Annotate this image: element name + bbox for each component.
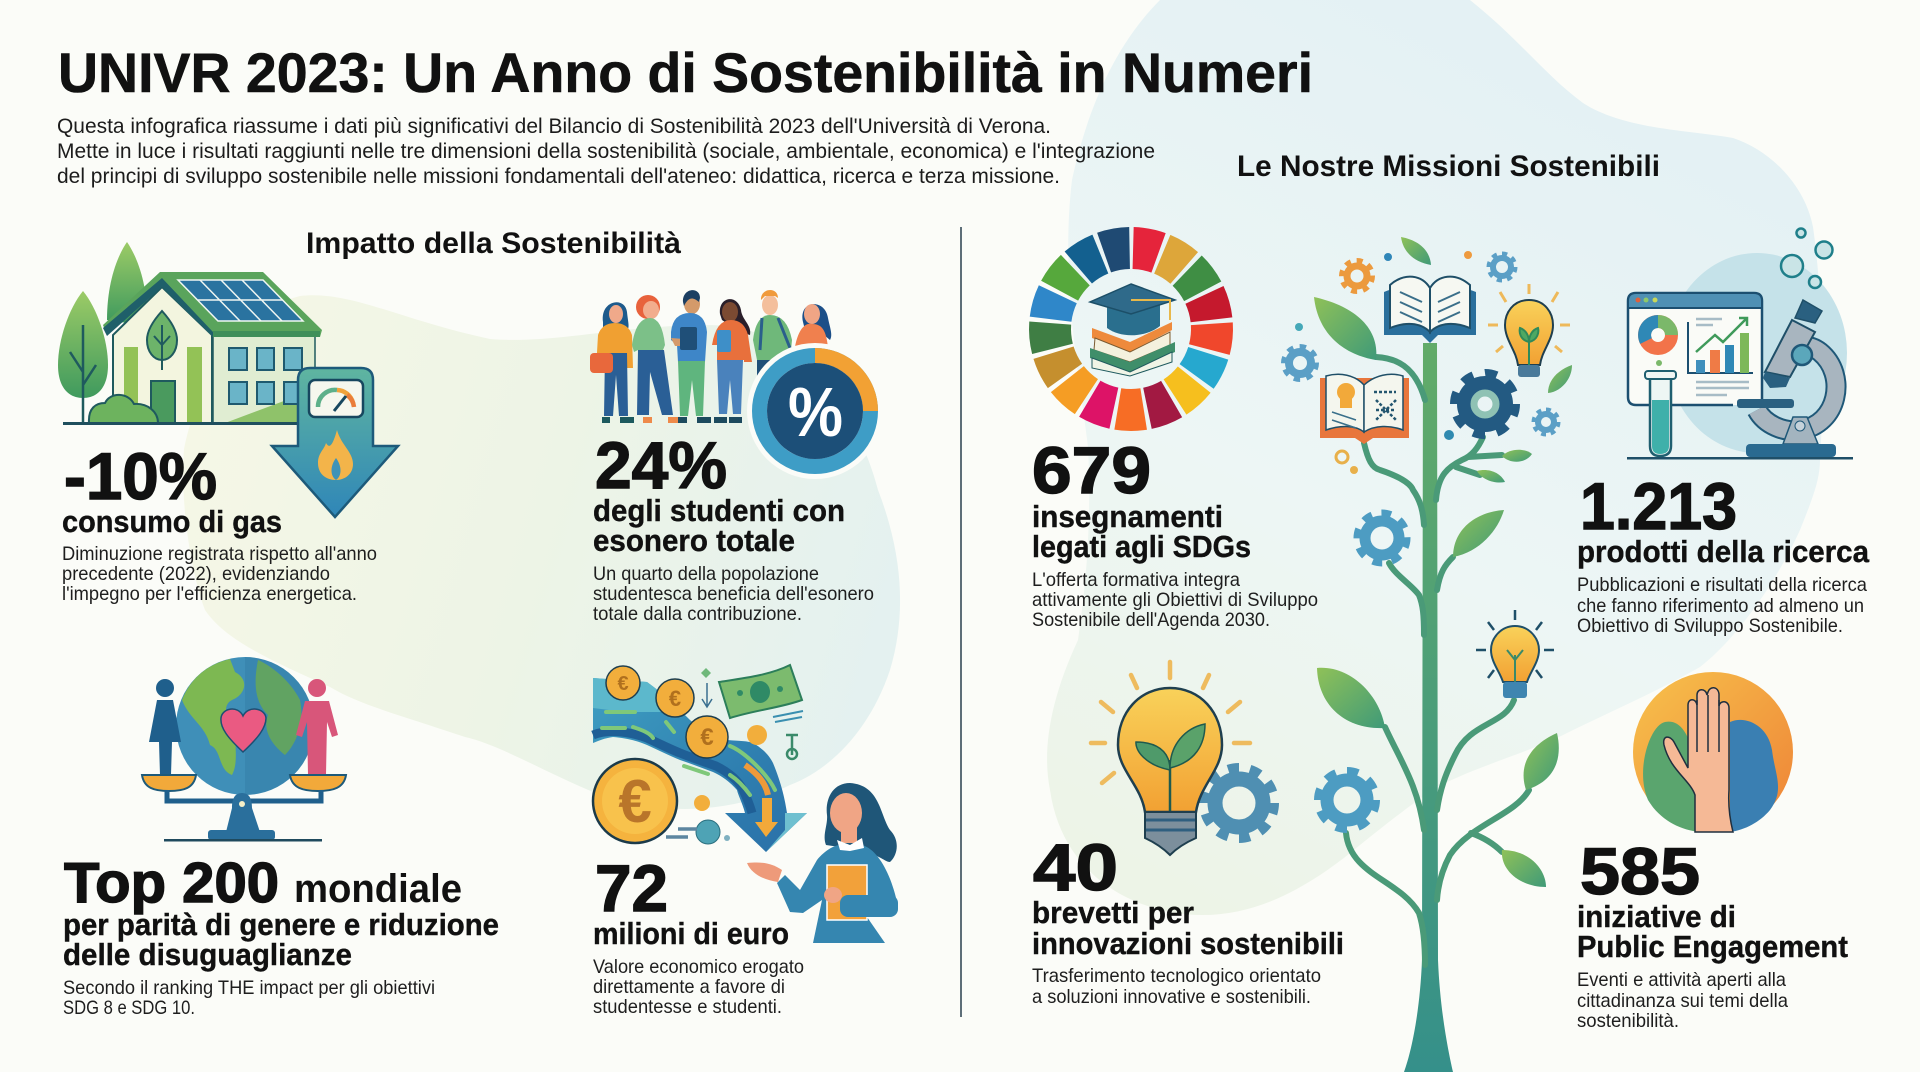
label: parità di genere: per parità di genere e riduzione (63, 907, 499, 942)
stat: -10%: -10% (64, 439, 217, 513)
panel: consumo di gas (58, 242, 398, 605)
icon: research lab (1627, 228, 1853, 460)
description: gas: l'impegno per l'efficienza energetica. (62, 583, 357, 605)
icon: light bulb with plant and gear (1091, 662, 1274, 855)
intro paragraph (57, 114, 1155, 188)
description: esonero: Un quarto della popolazione (593, 563, 819, 585)
icon: gas consumption arrow (272, 368, 398, 517)
description: pubblicazioni (1577, 574, 1867, 637)
panel: valore economico (593, 665, 898, 1018)
icon: SDG wheel with graduation cap (1016, 214, 1246, 444)
description: pubblicazioni: che fanno riferimento ad almeno un (1577, 595, 1864, 617)
description: gas: Diminuzione registrata rispetto all'anno (62, 543, 377, 565)
description: valore economico: Valore economico erogato (593, 956, 804, 978)
description: esonero: studentesca beneficia dell'esonero (593, 583, 874, 605)
icon: euro flow and student: € (617, 673, 629, 695)
description: eventi (1577, 969, 1788, 1032)
stat: 72: 72 (595, 851, 668, 925)
panel: prodotti della ricerca (1577, 228, 1870, 637)
description: ranking: SDG 8 e SDG 10. (63, 997, 195, 1019)
light bulb: top (1488, 284, 1570, 377)
description: pubblicazioni: Obiettivo di Sviluppo Sostenibile. (1577, 615, 1843, 637)
description: ranking (63, 977, 435, 1019)
label: milioni di euro: milioni di euro (593, 916, 789, 951)
description: gas: precedente (2022), evidenziando (62, 563, 330, 585)
description: ranking: Secondo il ranking THE impact per gli obiettivi (63, 977, 435, 999)
open book: left (1320, 374, 1409, 444)
heading: Impatto della Sostenibilità: Impatto della Sostenibilità (306, 227, 681, 260)
stat: Top 200 mondiale: mondiale (294, 867, 462, 911)
stat: 679: 679 (1032, 433, 1151, 507)
description: gas (62, 543, 377, 605)
description: valore economico: direttamente a favore di (593, 976, 785, 998)
stat: Top 200 mondiale (64, 851, 462, 915)
label: iniziative di Public Engagement: Public Engagement (1577, 929, 1848, 964)
icon: euro flow and student: € (700, 724, 714, 751)
label: parità di genere (63, 907, 499, 972)
icon: percent donut (747, 343, 883, 479)
label: consumo di gas: consumo di gas (62, 504, 282, 539)
description: eventi: Eventi e attività aperti alla (1577, 969, 1786, 991)
panel: insegnamenti SDGs (1016, 214, 1318, 631)
intro paragraph: Questa infografica riassume i dati più significativi del Bilancio di Sostenibilità 2023 dell'Università di Verona. (57, 114, 1051, 138)
panel: esonero studenti (590, 290, 883, 625)
panel: public engagement (1577, 672, 1848, 1032)
description: trasferimento tecnologico: Trasferimento tecnologico orientato (1032, 965, 1321, 987)
label: insegnamenti legati agli SDGs (1032, 499, 1251, 564)
icon: globe on balance scale (142, 657, 346, 842)
icon: euro flow and student (593, 665, 898, 943)
label: degli studenti con esonero totale: esonero totale (593, 523, 795, 558)
gears on the tree (1284, 254, 1558, 829)
label: degli studenti con esonero totale (593, 493, 845, 558)
illustration: knowledge tree (1284, 237, 1572, 1072)
tree trunk (1404, 343, 1453, 1072)
description: valore economico (593, 956, 804, 1018)
label: parità di genere: delle disuguaglianze (63, 937, 352, 972)
description: esonero (593, 563, 874, 625)
icon: percent donut: % (788, 373, 843, 451)
description: offerta formativa: Sostenibile dell'Agenda 2030. (1032, 609, 1270, 631)
intro paragraph: del principi di sviluppo sostenibile nelle missioni fondamentali dell'ateneo: didattica, ricerca e terza missione. (57, 164, 1060, 188)
description: eventi: cittadinanza sui temi della (1577, 990, 1788, 1012)
description: valore economico: studentesse e studenti. (593, 996, 782, 1018)
stat: 24%: 24% (595, 428, 727, 502)
intro paragraph: Mette in luce i risultati raggiunti nelle tre dimensioni della sostenibilità (sociale, ambientale, economica) e l'integrazione (57, 139, 1155, 163)
description: trasferimento tecnologico (1032, 965, 1321, 1008)
background blob: left (183, 295, 900, 809)
description: esonero: totale dalla contribuzione. (593, 603, 802, 625)
description: offerta formativa: L'offerta formativa integra (1032, 569, 1240, 591)
icon: euro flow and student: € (618, 768, 652, 835)
tree branches (1346, 357, 1529, 965)
tree leaves (1314, 237, 1572, 887)
stat: 40: 40 (1033, 830, 1118, 904)
description: pubblicazioni: Pubblicazioni e risultati della ricerca (1577, 574, 1867, 596)
description: eventi: sostenibilità. (1577, 1010, 1679, 1032)
stat: Top 200 mondiale: Top 200 (64, 851, 279, 915)
title: UNIVR 2023: Un Anno di Sostenibilità in Numeri (58, 41, 1313, 104)
description: offerta formativa (1032, 569, 1318, 631)
label: brevetti per innovazioni sostenibili: brevetti per (1032, 895, 1194, 930)
label: prodotti della ricerca: prodotti della ricerca (1577, 534, 1870, 569)
description: trasferimento tecnologico: a soluzioni innovative e sostenibili. (1032, 986, 1311, 1008)
label: degli studenti con esonero totale: degli studenti con (593, 493, 845, 528)
label: insegnamenti legati agli SDGs: legati agli SDGs (1032, 529, 1251, 564)
label: brevetti per innovazioni sostenibili (1032, 895, 1344, 961)
panel: brevetti (1032, 662, 1344, 1008)
description: offerta formativa: attivamente gli Obiettivi di Sviluppo (1032, 589, 1318, 611)
icon: euro flow and student: € (669, 686, 681, 711)
icon: group of students (590, 290, 831, 423)
stat: 585: 585 (1580, 834, 1700, 908)
light bulb: lower (1476, 610, 1554, 698)
background blob: right (1047, 0, 1822, 915)
decorative dots (1295, 251, 1472, 474)
icon: green house with trees (58, 242, 322, 425)
stat: 1.213: 1.213 (1580, 469, 1737, 543)
open book: top (1384, 277, 1476, 343)
label: insegnamenti legati agli SDGs: insegnamenti (1032, 499, 1223, 534)
label: brevetti per innovazioni sostenibili: innovazioni sostenibili (1032, 926, 1344, 961)
label: iniziative di Public Engagement (1577, 899, 1848, 964)
panel: parità di genere (63, 657, 499, 1019)
label: iniziative di Public Engagement: iniziative di (1577, 899, 1736, 934)
column divider (960, 227, 962, 1017)
heading: Le Nostre Missioni Sostenibili: Le Nostre Missioni Sostenibili (1237, 150, 1660, 183)
icon: raised hand in circle (1633, 672, 1793, 832)
